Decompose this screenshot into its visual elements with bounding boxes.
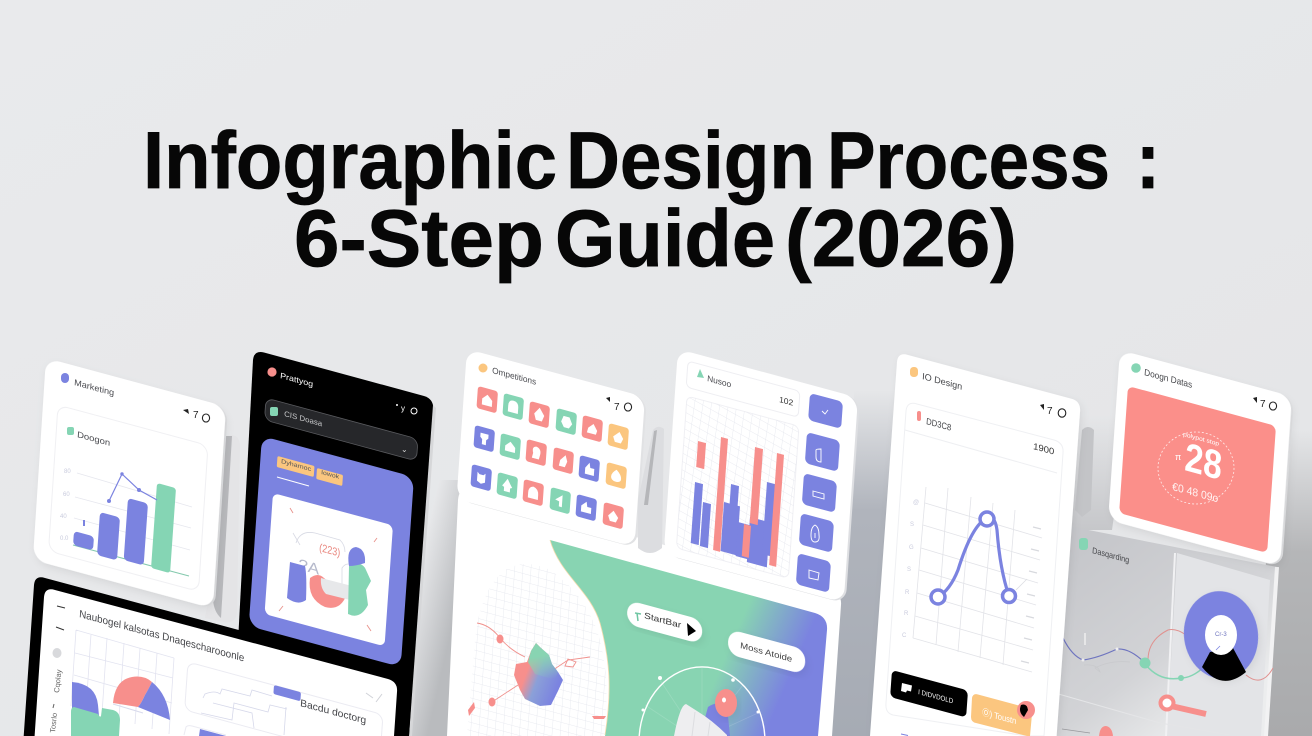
status icons: 7 xyxy=(1260,399,1266,410)
panel: blue illustration card xyxy=(249,436,414,667)
legend: Dasqarding xyxy=(1092,545,1130,565)
donut chart: Cr-3 xyxy=(1215,632,1227,638)
illustration card xyxy=(265,493,393,646)
side buttons xyxy=(796,393,843,593)
status icons: 7 xyxy=(193,410,199,421)
icon: green dot xyxy=(1131,363,1141,373)
status icons xyxy=(1253,397,1277,410)
lower card xyxy=(184,726,226,736)
panel: glass dashboard xyxy=(1054,525,1277,736)
orange button xyxy=(971,694,1035,736)
title: Guide xyxy=(555,194,775,284)
inner chart card: 1900 xyxy=(1033,441,1055,457)
chart legend: Doogon xyxy=(77,429,111,448)
map connectors xyxy=(477,623,590,702)
title: (2026) xyxy=(785,194,1017,284)
chart legend xyxy=(67,427,111,448)
illustration card: (223) xyxy=(319,542,341,560)
lower strip xyxy=(1055,693,1230,736)
line chart: C xyxy=(902,633,907,639)
panel: gray tab between cards xyxy=(638,427,664,553)
line chart: @ xyxy=(913,500,919,506)
icon: orange badge xyxy=(910,367,918,377)
flow chart card: Bacdu doctorg xyxy=(300,698,367,727)
chart header: 102 xyxy=(779,395,794,408)
icon: orange dot xyxy=(478,364,488,372)
dashboard title: Naubogel kalsotas Dnaqescharooonle xyxy=(79,608,245,665)
pill: start: StartBar xyxy=(644,610,682,630)
line chart xyxy=(902,487,1042,672)
bar chart with grid xyxy=(676,396,799,578)
sidebar xyxy=(48,606,65,733)
stat ring xyxy=(1158,431,1234,505)
radar dial xyxy=(639,667,765,736)
title xyxy=(143,116,1160,284)
status icons: y xyxy=(401,404,405,413)
strip: tab shading xyxy=(644,430,657,505)
green gradient panel xyxy=(550,540,827,736)
panel: black dashboard tablet xyxy=(24,577,412,736)
panel: black phone with illustration xyxy=(233,352,436,736)
chart header xyxy=(686,361,800,417)
black button xyxy=(890,670,968,718)
phone title: Prattyog xyxy=(280,371,313,389)
line chart: R xyxy=(905,590,910,596)
bar chart: 80 xyxy=(64,469,71,475)
panel: marketing bar chart card xyxy=(33,358,228,610)
status icons xyxy=(1040,404,1066,417)
line chart: G xyxy=(909,545,914,551)
bar chart: 0.0 xyxy=(60,536,69,542)
pill: more xyxy=(727,629,806,675)
key slider xyxy=(1160,696,1206,714)
coral panel xyxy=(1119,386,1276,553)
bar chart xyxy=(60,469,192,576)
stat ring: polypot stop xyxy=(1183,431,1220,448)
status icons xyxy=(396,404,417,414)
icon: red dot xyxy=(267,367,277,377)
grid map xyxy=(467,564,607,736)
card title: Ompetitions xyxy=(492,365,537,387)
card title: Marketing xyxy=(74,377,115,398)
pill: start xyxy=(626,600,703,644)
icon: blue status dot xyxy=(61,373,69,383)
orange tags xyxy=(277,456,343,486)
stat ring: π xyxy=(1175,452,1181,462)
status icons: 7 xyxy=(1047,406,1053,417)
illustration card: ?A xyxy=(298,556,321,579)
inner chart card xyxy=(49,405,208,592)
phone title: IO Design xyxy=(922,371,963,392)
grid with pie charts xyxy=(71,630,174,736)
status icons: 7 xyxy=(614,402,620,413)
black button: I DIDVDOLD xyxy=(918,688,953,705)
title: Infographic xyxy=(143,116,557,206)
blue tick xyxy=(901,734,908,736)
title: Design xyxy=(566,116,815,206)
title: 6-Step xyxy=(294,194,544,284)
status icons xyxy=(183,409,210,422)
bar chart: 40 xyxy=(60,514,67,520)
title: Process xyxy=(827,116,1110,206)
panel: line chart phone xyxy=(870,354,1080,736)
panel: tab beside line chart phone xyxy=(1075,427,1094,517)
panel: gray tab behind marketing card xyxy=(205,435,240,622)
title: : xyxy=(1136,116,1160,206)
orange button: Ⓞ) Toustn xyxy=(982,707,1017,726)
inner chart card: DD3C8 xyxy=(926,416,952,433)
search bar: ⌄ xyxy=(401,445,408,454)
chart header: Nusoo xyxy=(707,373,732,389)
tablet screen xyxy=(35,589,397,736)
stat ring: 28 xyxy=(1183,434,1224,489)
line chart xyxy=(1063,630,1273,681)
stat ring: €0 48 09o xyxy=(1172,481,1219,505)
panel: big white phone with green panel xyxy=(447,490,841,736)
icon grid xyxy=(470,386,629,529)
status icons xyxy=(606,397,632,413)
orange tags: Dyhamoc xyxy=(281,458,311,473)
pill: more: Moss Atoide xyxy=(740,640,793,664)
search bar: CIS Doasa xyxy=(284,409,323,428)
legend xyxy=(1079,538,1130,565)
sidebar: Tosrlo xyxy=(48,712,59,733)
line chart: S xyxy=(910,522,914,528)
donut chart xyxy=(1178,586,1264,684)
search bar xyxy=(264,398,418,461)
flow chart card xyxy=(185,662,383,736)
inner chart card xyxy=(886,403,1063,736)
sidebar: Cqolay xyxy=(52,669,63,693)
card title: Doogn Datas xyxy=(1144,367,1193,390)
panel: icon grid card xyxy=(456,349,647,548)
panel: bar chart with side buttons xyxy=(664,349,860,604)
panel: coral stat card xyxy=(1108,350,1294,567)
map blob xyxy=(514,643,563,706)
line chart: R xyxy=(904,611,909,617)
line chart: S xyxy=(907,567,911,573)
orange tags: Iowok xyxy=(321,469,340,481)
bar chart: 60 xyxy=(63,492,70,498)
